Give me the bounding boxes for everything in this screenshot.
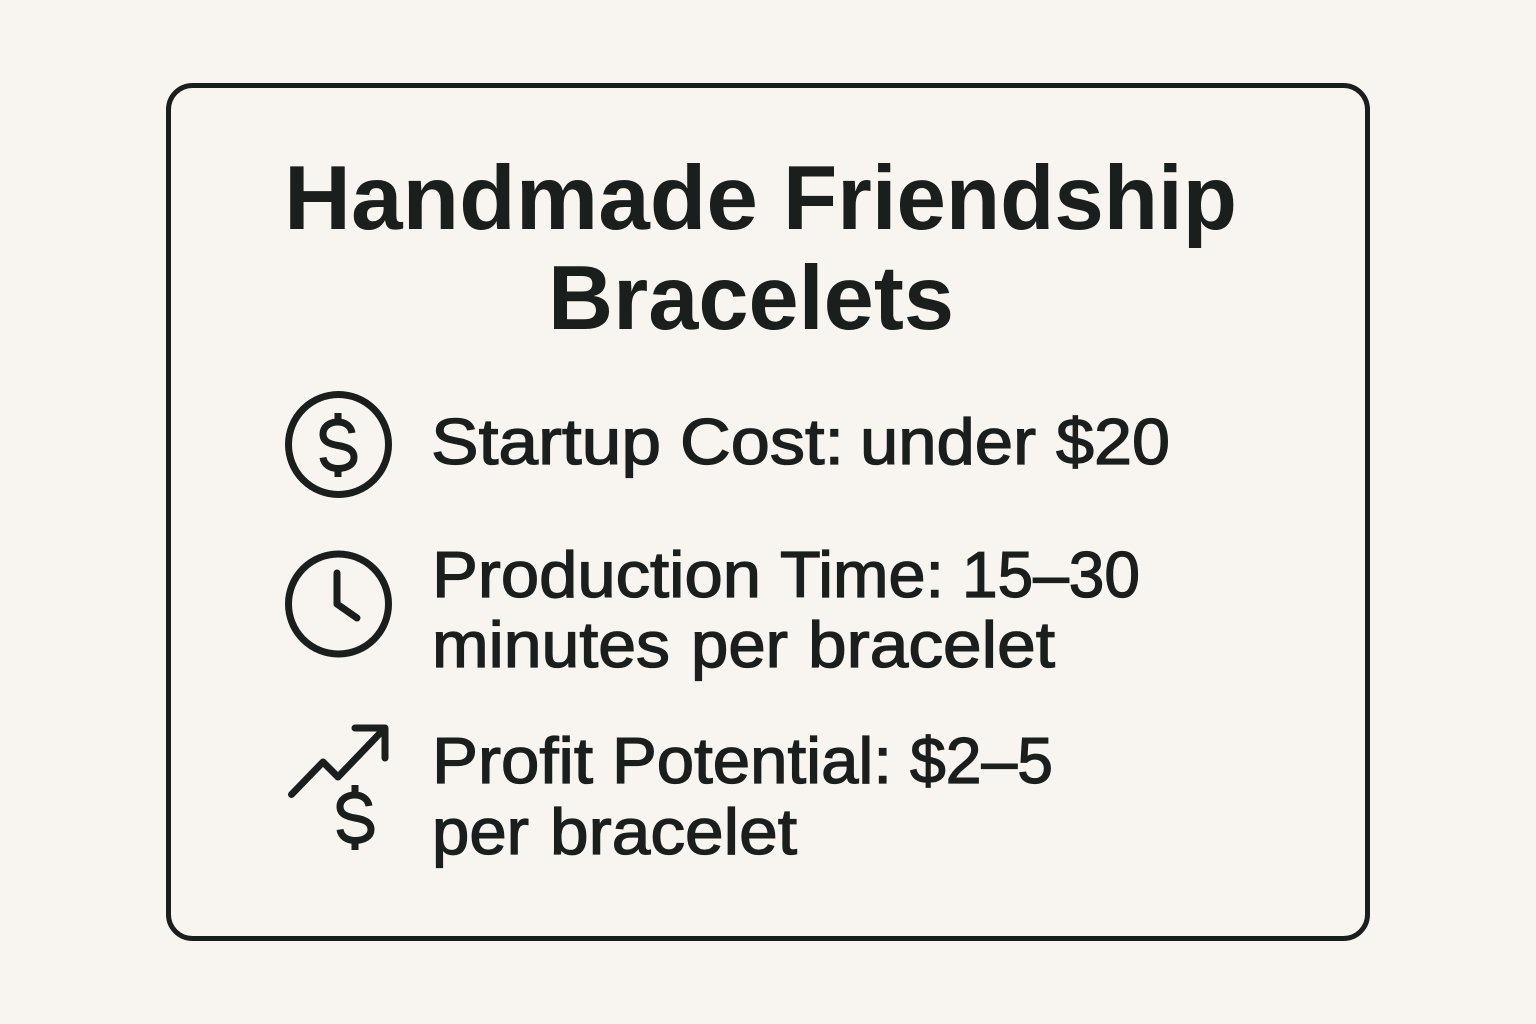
text: startup cost: Cost:: [680, 405, 844, 478]
text: production time: 15–30: [962, 538, 1140, 611]
text: production time: minutes: [432, 608, 670, 681]
text: production time: bracelet: [808, 608, 1055, 681]
text: profit potential: per: [432, 795, 529, 868]
panel: card: [168, 86, 1368, 938]
text: profit potential: bracelet: [550, 795, 797, 868]
icon: clock: [288, 554, 388, 654]
icon: dollar coin: [288, 394, 388, 494]
text: production time: per: [691, 608, 788, 681]
text: profit potential: [432, 724, 1053, 868]
icon: profit trend with dollar: [292, 728, 385, 850]
text: production time: Production: [432, 538, 761, 611]
title: Handmade: [284, 148, 758, 249]
text: profit potential: Profit: [432, 724, 593, 797]
text: startup cost: $20: [1056, 405, 1170, 478]
title: Bracelets: [548, 248, 954, 349]
text: startup cost: under: [860, 405, 1036, 478]
text: startup cost: [431, 405, 1170, 478]
title: [284, 148, 1237, 349]
text: startup cost: Startup: [431, 405, 661, 478]
title: Friendship: [783, 148, 1237, 249]
text: production time: Time:: [780, 538, 944, 611]
text: profit potential: Potential:: [612, 724, 892, 797]
text: profit potential: $2–5: [910, 724, 1053, 797]
text: production time: [432, 538, 1140, 681]
